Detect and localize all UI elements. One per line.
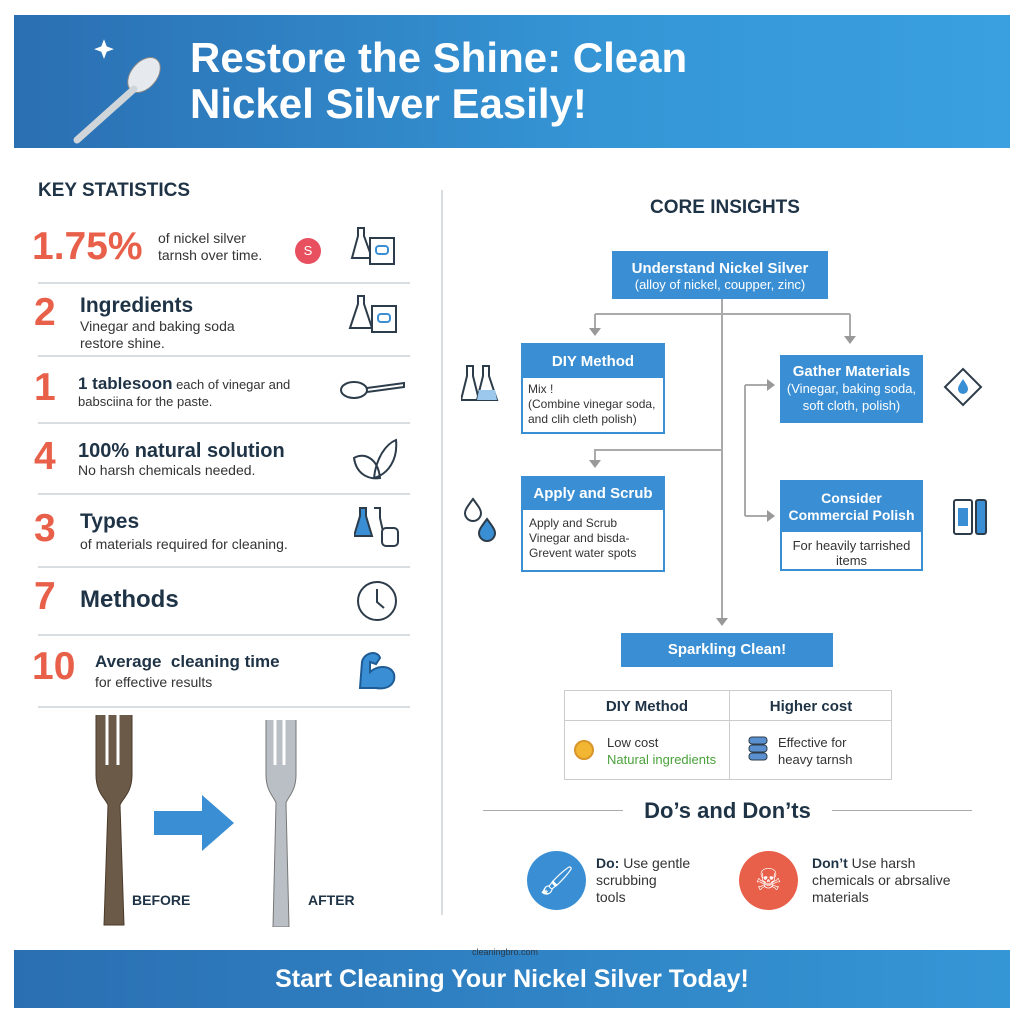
stat 3: babsciina for the paste.	[78, 394, 212, 409]
stat 2: Ingredients	[80, 294, 193, 317]
box: DIY method: (Combine vinegar soda,	[528, 397, 655, 411]
comparison table: heavy tarnsh	[778, 752, 852, 767]
stat 7	[32, 645, 396, 690]
flowchart	[589, 299, 856, 626]
box: DIY method	[521, 343, 665, 434]
comparison table: Natural ingredients	[607, 752, 716, 767]
title	[190, 34, 687, 127]
heading: core insights: CORE INSIGHTS	[650, 197, 800, 218]
text: cleaningbro.com	[472, 947, 538, 957]
heading: key statistics: KEY STATISTICS	[38, 180, 190, 201]
stat 1: 1.75%	[32, 225, 143, 268]
icon: tarnished fork	[96, 715, 132, 926]
comparison table	[564, 690, 892, 780]
before/after forks: BEFORE	[132, 892, 190, 908]
icon: spoon	[74, 39, 161, 144]
do item	[527, 851, 690, 910]
box: DIY method: and clih cleth polish)	[528, 412, 637, 426]
icon: drops	[464, 498, 496, 542]
footer banner	[14, 950, 1010, 1008]
comparison table: Low cost	[607, 735, 658, 750]
stat 4: 4	[34, 435, 56, 478]
stat 3	[34, 366, 405, 409]
header banner	[14, 15, 1010, 148]
icon: flasks	[461, 365, 498, 401]
stat 2: 2	[34, 291, 56, 334]
icon: bottles	[953, 499, 987, 535]
icon: coin stack	[748, 736, 768, 760]
box: commercial polish: items	[836, 553, 867, 568]
title: Restore the Shine: Clean	[190, 34, 687, 81]
box: understand: (alloy of nickel, coupper, zinc)	[635, 277, 805, 292]
box: apply and scrub: Vinegar and bisda-	[529, 531, 630, 545]
do item: Do: Use gentle	[596, 855, 690, 871]
don't item: chemicals or abrsalive	[812, 872, 950, 888]
stat 7: for effective results	[95, 674, 212, 690]
don't item: Don’t Use harsh	[812, 855, 915, 871]
don't item	[739, 851, 950, 910]
box: commercial polish: For heavily tarrished	[793, 538, 910, 553]
icon: skull	[739, 851, 798, 910]
comparison table: Effective for	[778, 735, 846, 750]
stat 6: 7	[34, 575, 56, 618]
stat 4: 100% natural solution	[78, 440, 285, 462]
stat 2: Vinegar and baking soda	[80, 318, 235, 334]
icon: clean fork	[266, 720, 296, 927]
stat 7: 10	[32, 645, 75, 688]
comparison table: DIY Method	[606, 698, 688, 715]
stat 1: S	[304, 243, 312, 258]
stat 3: 1	[34, 366, 56, 409]
stat 7: Average cleaning time	[95, 652, 280, 671]
before/after forks: AFTER	[308, 892, 355, 908]
stat 5: 3	[34, 507, 56, 550]
before/after forks	[96, 715, 355, 927]
stat 1: tarnsh over time.	[158, 247, 262, 263]
do item: scrubbing	[596, 872, 657, 888]
box: understand: Understand Nickel Silver	[632, 260, 808, 277]
box: commercial polish	[780, 480, 923, 571]
icon: brush	[527, 851, 586, 910]
icon: cloth with drop	[944, 368, 982, 406]
box: gather materials: (Vinegar, baking soda, soft cloth, polish)	[787, 381, 916, 413]
do item: tools	[596, 889, 626, 905]
stat rows	[32, 225, 410, 708]
stat 1: of nickel silver	[158, 230, 246, 246]
box: apply and scrub	[521, 476, 665, 572]
heading: do's and don'ts: Do’s and Don’ts	[644, 798, 811, 823]
don't item: materials	[812, 889, 869, 905]
stat 4: No harsh chemicals needed.	[78, 462, 255, 478]
stat 5: of materials required for cleaning.	[80, 536, 288, 552]
box: gather materials: Gather Materials	[793, 363, 910, 380]
box: gather materials	[780, 355, 923, 423]
title: Nickel Silver Easily!	[190, 80, 587, 127]
stat 2	[34, 291, 397, 351]
box: understand	[612, 251, 828, 299]
arrow	[154, 795, 234, 851]
stat 2: restore shine.	[80, 335, 165, 351]
stat 1	[32, 225, 395, 268]
icon: coin	[574, 740, 594, 760]
icon: skull: ☠	[755, 864, 782, 897]
comparison table: Higher cost	[770, 698, 852, 715]
stat 5	[34, 507, 399, 552]
box: sparkling clean: Sparkling Clean!	[668, 641, 786, 658]
stat 5: Types	[80, 510, 139, 533]
box: DIY method: DIY Method	[552, 353, 634, 370]
stat 6: Methods	[80, 586, 179, 613]
box: apply and scrub: Grevent water spots	[529, 546, 636, 560]
box: commercial polish: Consider Commercial Polish	[788, 490, 915, 523]
box: DIY method: Mix !	[528, 382, 553, 396]
stat 3: 1 tablesoon each of vinegar and	[78, 374, 290, 393]
stat 6	[34, 575, 397, 621]
box: sparkling clean	[621, 633, 833, 667]
box: apply and scrub: Apply and Scrub	[529, 516, 617, 530]
stat 4	[34, 435, 398, 480]
box: apply and scrub: Apply and Scrub	[533, 485, 653, 502]
icon: brush: 🖌	[539, 865, 574, 896]
footer banner: Start Cleaning Your Nickel Silver Today!	[275, 965, 749, 993]
